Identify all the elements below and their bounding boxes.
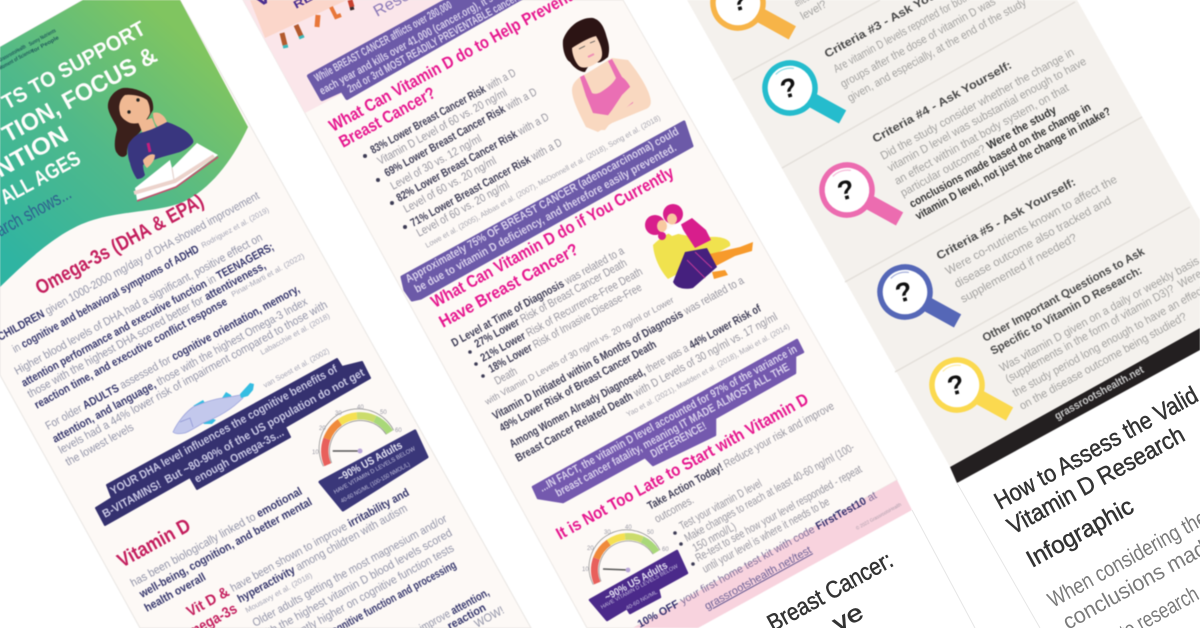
risk reduction list: 71% Lower Breast Cancer Risk with a D (409, 137, 564, 230)
criteria 5 text: supplemented if needed? (959, 232, 1079, 306)
risk reduction list: 69% Lower Breast Cancer Risk with a D (383, 86, 539, 180)
gauge: vitamin D levels (582, 525, 669, 585)
heading: current breast cancer (428, 163, 677, 332)
combined benefits text: Mousavy et al. (2018) (244, 570, 314, 615)
omega-3 body text: levels had a 44% lower risk of impairment compared to those with (57, 299, 330, 457)
diagnosis and outcome text: Among Women Already Diagnosed, there was a 44% Lower Risk of (508, 303, 763, 451)
callout: DHA banner: B-VITAMINS! But ~80-90% of the US population do not get (101, 367, 367, 521)
action list: until your level is where it needs to be (701, 496, 832, 576)
omega-3 body text: Labacchie et al. (2018) (259, 311, 332, 357)
icon: orange magnifier (704, 0, 804, 55)
panel: vitamin D and breast cancer infographic (243, 0, 912, 628)
criteria 5 text: disease outcome also tracked and (953, 195, 1114, 291)
callout: 90% US adults (590, 551, 687, 620)
panel edge line (957, 483, 1040, 628)
criteria 5 text: Criteria #5 - Ask Yourself: (935, 176, 1078, 263)
gauge: vitamin D levels (312, 405, 402, 466)
panel background (687, 0, 1200, 467)
heading: current breast cancer: What Can Vitamin D do if You Currently (428, 163, 677, 312)
criteria 4 text: particular outcome? Were the study (899, 104, 1059, 200)
vitamin D body text: well-being, cognition, and better mental (137, 496, 314, 601)
pink offer band: 10% OFF your first home test kit with code FirstTest10 at (636, 490, 879, 628)
omega-3 body text: CHILDREN given 1000-2000 mg/day of DHA showed improvement (0, 190, 262, 344)
diagnosis and outcome text (450, 245, 792, 465)
risk reduction list: Level of 60 vs. 20 ng/ml (402, 155, 499, 216)
diagnosis and outcome text: D Level at Time of Diagnosis was related to a (450, 245, 627, 350)
other questions text: Specific to Vitamin D Research: (989, 265, 1144, 358)
article heading: how to assess: Vitamin D Research (1003, 421, 1189, 540)
diagnosis and outcome text: Vitamin D Initiated within 6 Months of Diagnosis was related to a (491, 275, 747, 423)
action list: Make changes to reach at least 40-60 ng/ml (100- (683, 442, 857, 545)
other questions text (981, 246, 1200, 413)
callout: 90% US adults: 40-60 NG/ML (100-150 NMOL/L) (340, 462, 411, 505)
heading: TS TO SUPPORT (0, 17, 150, 114)
pink offer band: grassrootshealth.net/test (703, 544, 814, 613)
illustration: girl reading (108, 88, 218, 201)
icon: yellow magnifier (923, 351, 1022, 436)
criteria 5 text: Were co-nutrients known to affect the (944, 174, 1119, 278)
risk reduction list: Level of 60 vs. 20 ng/ml (415, 179, 512, 240)
panel edge line (912, 510, 975, 628)
panel background (243, 0, 897, 628)
heading: not too late: It is Not Too Late to Start with Vitamin D (553, 390, 812, 544)
gauge: vitamin D levels: 60 (662, 547, 669, 553)
article heading: how to assess (990, 382, 1200, 573)
diagnosis and outcome text: with Vitamin D Levels of 30 ng/ml vs. 20 ng/ml or Lower (482, 295, 675, 407)
criteria 4 text: an effect within that body system, on that (893, 82, 1072, 188)
risk reduction list (363, 67, 662, 250)
salmon title box (250, 0, 347, 38)
omega-3 body text: For older ADULTS assessed for cognitive orientation, memory, (44, 283, 302, 433)
combined benefits text: hyperactivity among children with autism (236, 503, 410, 606)
panel: nutrients for attention infographic (0, 0, 531, 628)
gauge: vitamin D levels: 30 (604, 530, 611, 536)
omega-3 body text: Pinar-Marti et al. (2022) (230, 251, 306, 299)
action list: Test your vitamin D level (678, 478, 764, 533)
heading: current breast cancer: Have Breast Cancer? (436, 240, 582, 332)
gauge: vitamin D levels: 20 (587, 546, 594, 552)
criteria 4 text: vitamin D level was substantial enough to have (886, 56, 1089, 175)
combined benefits text: have been shown to improve irritability and (229, 487, 411, 595)
callout: 90% US adults: ~90% US Adults (336, 439, 405, 485)
criteria 4 text: conclusions made based on the change in (908, 101, 1093, 211)
criteria 4 text (871, 47, 1113, 223)
callout: 90% US adults (320, 431, 427, 510)
omega-3 body text: attention performance and executive function in TEENAGERS; (20, 241, 276, 390)
icon: teal magnifier (756, 54, 855, 139)
logo text: Sunny Nutrients (28, 28, 57, 48)
omega-3 body text: in cognitive and behavioral symptoms of ADHD (11, 243, 201, 356)
panel: how to assess vitamin D research infographic (687, 0, 1200, 483)
vit D and omega-3 label (177, 583, 240, 628)
vitamin D body text: health overall (143, 571, 208, 615)
icon: fish (173, 383, 254, 434)
criteria 4 text: Did the study consider whether the change in (879, 47, 1076, 163)
risk reduction list: Vitamin D Level of 60 vs. 20 ng/ml (376, 87, 509, 168)
omega-3 body text: reaction time, and executive conflict response (33, 296, 229, 412)
heading: prevention: Breast Cancer? (336, 83, 439, 152)
callout: 90% US adults: ~90% US Adults (603, 559, 670, 604)
omega-3 body text: the lowest levels (64, 421, 136, 469)
gauge: vitamin D levels: 20 (319, 426, 326, 432)
logo text (0, 28, 60, 72)
diagnosis and outcome text: 27% Lower Risk of Breast Cancer Death (473, 257, 629, 351)
omega-3 body text: Rodriguez et al. (2019) (200, 205, 271, 250)
section dividers (733, 0, 1190, 372)
logo text: for People (31, 35, 60, 55)
illustration: walkers' legs (282, 0, 354, 47)
combined benefits text: Older adults getting the most magnesium and/or (251, 513, 449, 628)
callout: in fact: breast cancer fatality, meaning IT MADE ALMOST ALL THE (554, 361, 792, 500)
heading: TION, FOCUS & (0, 42, 162, 148)
green header (0, 0, 248, 287)
omega-3 body text (0, 190, 332, 469)
action list (646, 400, 865, 576)
article heading: how to assess: Infographic (1022, 493, 1138, 573)
title fragments (250, 0, 421, 21)
gauge: vitamin D levels: 60 (395, 428, 402, 434)
callout: DHA banner: YOUR DHA level influences the cognitive benefits of (109, 363, 340, 498)
gauge: vitamin D levels: 10 (582, 567, 589, 573)
omega-3 body text: Higher blood levels of DHA had a significant, positive effect on (13, 232, 265, 378)
action list: 150 nmol/L) (691, 521, 739, 555)
question mark: ? (944, 369, 967, 402)
gauge: vitamin D levels: 40 (625, 525, 632, 531)
risk reduction list: 83% Lower Breast Cancer Risk with a D (369, 67, 518, 157)
callout: in fact: DIFFERENCE! (649, 420, 709, 461)
callout: in fact: ...IN FACT, the vitamin D level accounted for 97% of the variance in (538, 343, 799, 495)
diagnosis and outcome text: Yao et al. (2021), Madden et al. (2018), Maki et al. (2014) (625, 322, 792, 419)
criteria 4 text: Criteria #4 - Ask Yourself: (871, 59, 1014, 146)
other questions text: Other Important Questions to Ask (981, 246, 1147, 345)
pink offer band: © 2022 GrassrootsHealth (855, 501, 903, 532)
vitamin D body text: has been biologically linked to emotional (129, 486, 304, 590)
vitamin D heading: Vitamin D (114, 515, 195, 572)
diagnosis and outcome text: 21% Lower Risk of Recurrence-Free Death (479, 266, 645, 365)
panel background (0, 0, 531, 628)
diagnosis and outcome text: 18% Lower Risk of Invasive Disease-Free (487, 282, 644, 376)
other questions text: on the disease outcome being studied? (1018, 311, 1189, 413)
risk reduction list: Level of 30 vs. 12 ng/ml (389, 133, 484, 193)
diagnosis and outcome text: Breast Cancer Related Death with D Levels of 30 ng/ml vs. 17 ng/ml (514, 311, 780, 465)
icon: blue magnifier (871, 258, 970, 343)
omega-3 heading: Omega-3s (DHA & EPA) (32, 190, 208, 299)
callout: DHA banner: enough Omega-3s... (193, 427, 286, 486)
question mark: ? (892, 276, 915, 309)
pink header background (243, 0, 520, 113)
footer url: grassrootshealth.net (1053, 364, 1146, 423)
diagnosis and outcome text: Death (493, 366, 519, 388)
gauge: vitamin D levels: 50 (647, 530, 654, 536)
omega-3 body text: those with the highest DHA scored better for attentiveness, (26, 260, 268, 401)
callout: 75 percent preventable: be due to vitamin D deficiency, and therefore easily prevented. (413, 142, 679, 296)
callout: 90% US adults: HAVE VITAMIN D LEVELS BELOW (600, 563, 680, 611)
illustration: woman (563, 18, 651, 132)
gauge: vitamin D levels: 30 (335, 411, 342, 417)
risk reduction list: 82% Lower Breast Cancer Risk with a D (395, 111, 551, 205)
action list: Take Action Today! Reduce your risk and improve (646, 400, 836, 513)
vit D and omega-3 label: Vit D & (184, 583, 232, 621)
black footer band (950, 328, 1200, 483)
action list: Re-test to see how your level responded - repeat (694, 463, 865, 565)
callout: 90% US adults: 40-60 NG/ML (625, 590, 659, 612)
callout: 90% US adults: HAVE VITAMIN D LEVELS BELOW (333, 446, 417, 496)
question mark: ? (777, 72, 800, 105)
callout: 75 percent preventable: Approximately 75% OF BREAST CANCER (adenocarcinoma) could (404, 126, 681, 286)
gauge: vitamin D levels: 50 (380, 410, 387, 416)
heading (0, 17, 162, 209)
criteria 4 text: vitamin D level, not just the change in intake? (914, 106, 1113, 223)
icon: pink magnifier (813, 156, 912, 241)
diagnosis and outcome text: 49% Lower Risk of Breast Cancer Death (498, 339, 659, 435)
omega-3 body text: attention, and language, those with the highest Omega-3 Index (51, 296, 310, 446)
omega-3 body text: van Soest et al. (2002) (262, 346, 331, 390)
gauge: vitamin D levels: 40 (357, 405, 364, 411)
action list: outcomes. (653, 494, 696, 526)
question mark: ? (834, 174, 857, 207)
illustration: couple (645, 204, 753, 289)
risk reduction list: Lowe et al. (2005), Abbas et al. (2007), McDonnell et al. (2018), Song et al. (2018) (424, 113, 662, 250)
gauge: vitamin D levels: 10 (312, 450, 319, 456)
